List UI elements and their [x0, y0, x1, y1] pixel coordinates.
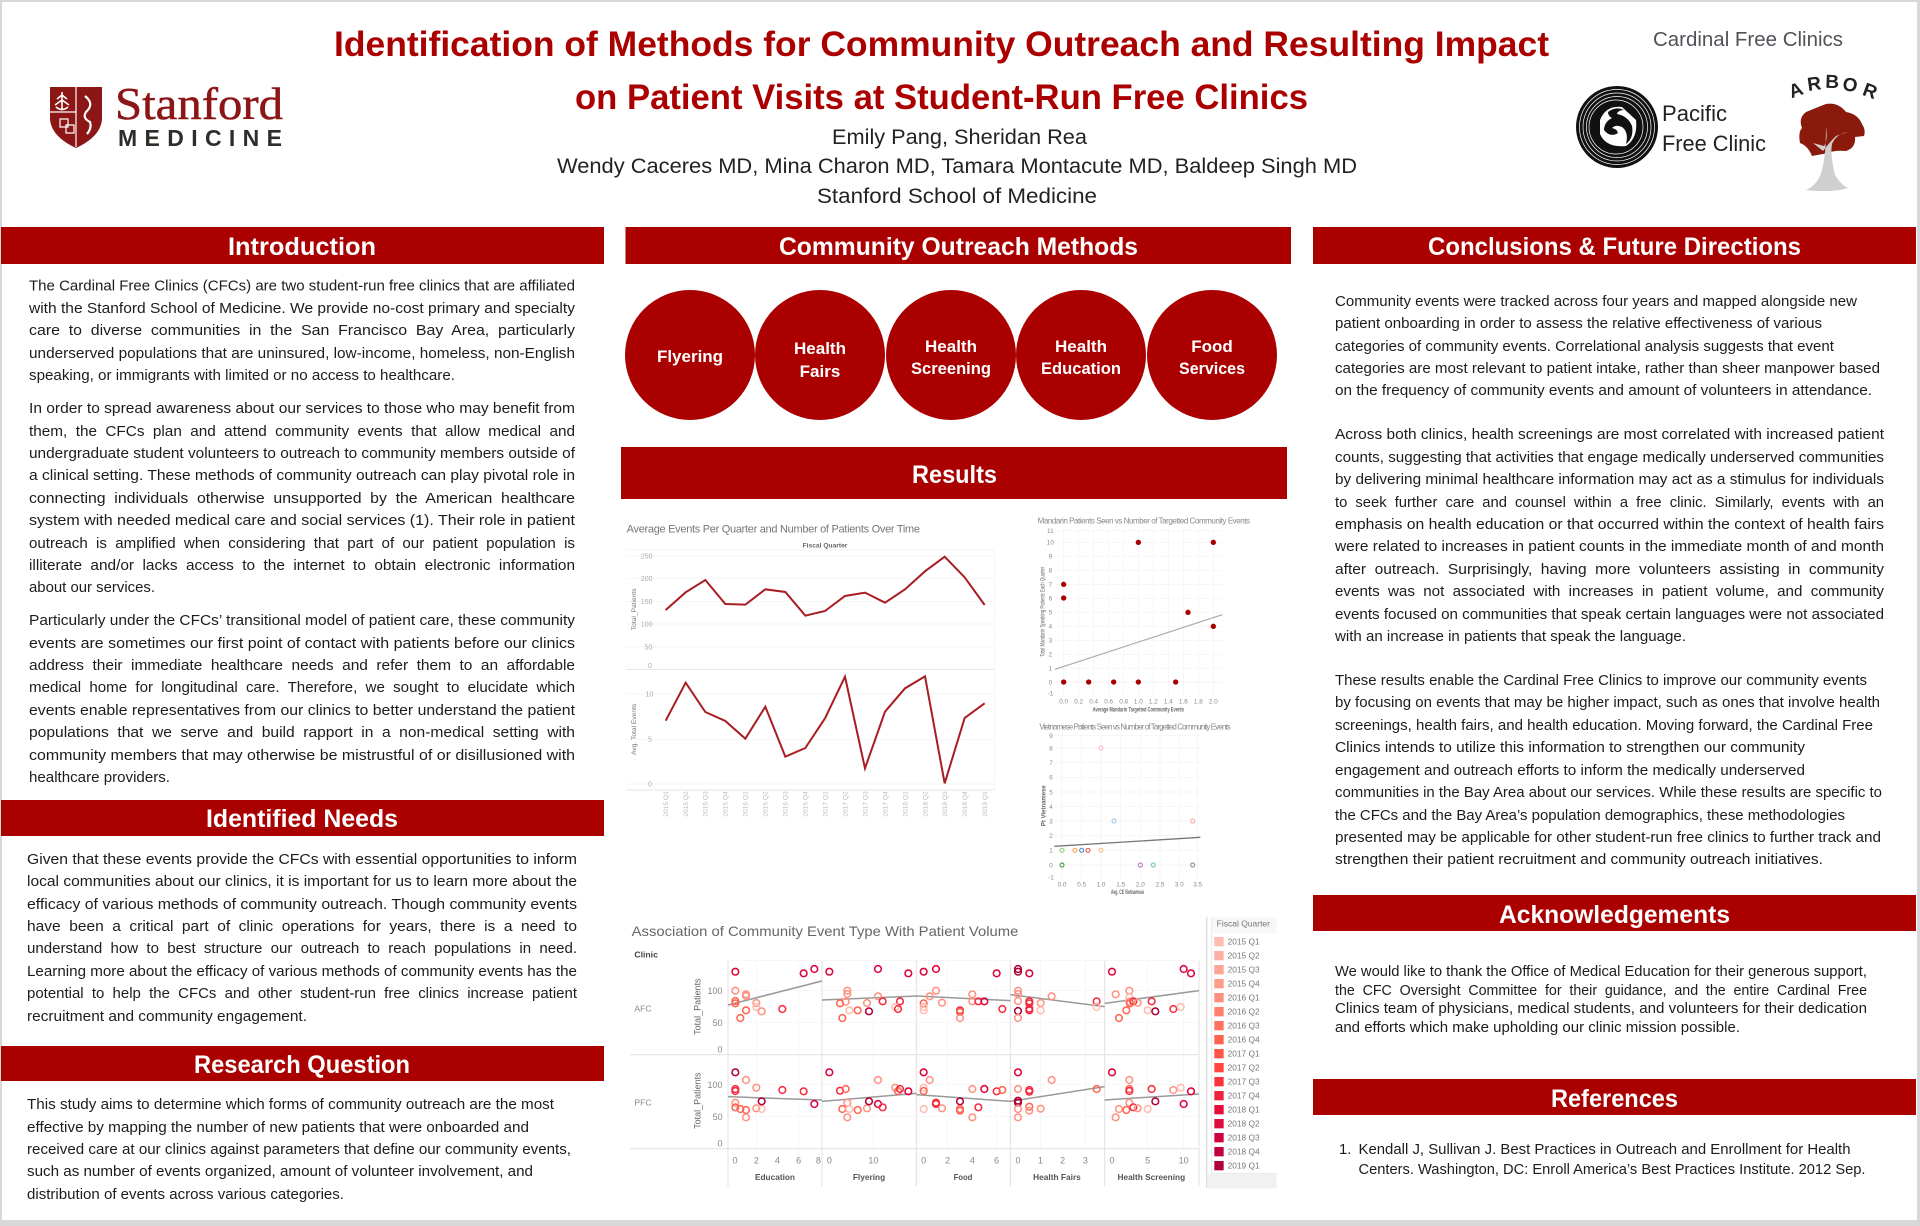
line chart: average events and patients over time: 2016 Q4: [803, 791, 810, 817]
heading: acknowledgements: Acknowledgements: [1499, 901, 1730, 929]
legend: fiscal quarter: 2015 Q1: [1228, 937, 1260, 947]
text block: identified needs: local communities about our clinics, it is important for us to learn more about the: [27, 874, 577, 890]
scatter chart: community event type vs patient volume: 1: [1038, 1155, 1043, 1165]
text block: introduction: community members that may otherwise be mistrustful of or disillusioned with: [29, 748, 575, 764]
text block: conclusions: counts, suggesting that activities that engage medically underserved communities: [1335, 450, 1884, 466]
heading: introduction: [1, 227, 604, 264]
heading: community outreach methods: Community Outreach Methods: [779, 233, 1138, 261]
scatter chart: community event type vs patient volume: 10: [1179, 1155, 1189, 1165]
text block: conclusions: screenings, health fairs, and health education. Moving forward, the Cardinal Free: [1335, 718, 1873, 734]
title: Identification of Methods for Community Outreach and Resulting Impact: [334, 25, 1549, 64]
scatter chart: mandarin patients: 6: [1049, 596, 1053, 603]
heading: identified needs: Identified Needs: [206, 805, 398, 833]
circle: health fairs: [755, 290, 885, 420]
text block: conclusions: events focused on communities that speak certain languages were not associated: [1335, 607, 1884, 623]
text block: conclusions: engagement and outreach efforts to inform the medically underserved: [1335, 763, 1805, 779]
text block: conclusions: strengthen their patient recruitment and community outreach initiatives.: [1335, 852, 1823, 868]
scatter chart: mandarin patients: 1.4: [1164, 699, 1173, 706]
legend: fiscal quarter: 2016 Q2: [1228, 1007, 1260, 1017]
scatter chart: mandarin patients: 10: [1047, 540, 1054, 547]
logo: Arbor Free Clinic: R: [1806, 73, 1823, 96]
circle: food services: Food: [1191, 337, 1233, 356]
scatter chart: mandarin patients: 1.6: [1179, 699, 1188, 706]
authors and affiliation: [557, 126, 1357, 208]
scatter chart: mandarin patients: 1.0: [1134, 699, 1143, 706]
text block: introduction: with the Stanford School of Medicine. We provide no-cost primary and specialty: [28, 301, 576, 317]
scatter chart: community event type vs patient volume: PFC: [634, 1097, 652, 1107]
legend: fiscal quarter: 2015 Q3: [1228, 965, 1260, 975]
text block: conclusions: categories are most relevant to patient intake, rather than sheer manpower based: [1335, 361, 1880, 377]
text block: research question: This study aims to determine which forms of community outreach are the most: [27, 1097, 554, 1113]
text block: conclusions: events was not associated with increases in patient volume, and community: [1335, 584, 1885, 600]
scatter chart: mandarin patients: 8: [1049, 568, 1053, 575]
scatter chart: community event type vs patient volume: Association of Community Event Type With Patient Volume: [632, 923, 1019, 939]
text block: introduction: connecting individuals otherwise unsupported by the American healthcare: [29, 491, 575, 507]
scatter chart: mandarin patients: 11: [1047, 528, 1054, 535]
scatter chart: community event type vs patient volume: 0: [717, 1138, 722, 1148]
legend: fiscal quarter: Fiscal Quarter: [1217, 920, 1270, 929]
scatter chart: community event type vs patient volume: 6: [994, 1155, 999, 1165]
heading: conclusions and future directions: [1313, 227, 1916, 264]
legend: fiscal quarter: 2018 Q4: [1228, 1147, 1260, 1157]
scatter chart: vietnamese patients: 3.5: [1193, 882, 1203, 889]
line chart: average events and patients over time: 2018 Q1: [902, 791, 909, 817]
scatter chart: vietnamese patients: 6: [1049, 775, 1053, 782]
text block: references: Centers. Washington, DC: Enroll America’s Best Practices Institute. 2012 Sep.: [1358, 1162, 1866, 1178]
text block: introduction: underserved populations that are uninsured, low-income, homeless, non-English: [29, 346, 575, 362]
scatter chart: community event type vs patient volume: 0: [1015, 1155, 1020, 1165]
line chart: average events and patients over time: 2017 Q3: [862, 791, 869, 817]
scatter chart: community event type vs patient volume: 50: [713, 1112, 723, 1122]
line chart: average events and patients over time: 2016 Q2: [763, 791, 770, 817]
text block: introduction: care to diverse communities in the San Francisco Bay Area, particularly: [29, 323, 576, 339]
text block: conclusions: by delivering minimal healthcare information may act as a stimulus for individuals: [1335, 472, 1884, 488]
scatter chart: community event type vs patient volume: 10: [868, 1155, 878, 1165]
legend: fiscal quarter: 2016 Q1: [1228, 993, 1260, 1003]
authors and affiliation: Stanford School of Medicine: [817, 185, 1097, 208]
scatter chart: mandarin patients: 5: [1049, 610, 1053, 617]
scatter chart: mandarin patients: [1038, 516, 1250, 713]
text block: identified needs: [27, 852, 577, 1025]
circle: health education: Health: [1055, 337, 1107, 356]
text block: conclusions: with an increase in patients that speak the language.: [1334, 629, 1686, 645]
text block: introduction: a clinical setting. These methods of community outreach can play pivotal role in: [29, 468, 575, 484]
text block: acknowledgements: [1335, 964, 1867, 1036]
scatter chart: vietnamese patients: 9: [1049, 733, 1053, 740]
scatter chart: community event type vs patient volume: Health Screening: [1117, 1172, 1185, 1182]
text block: introduction: events are sometimes our first point of contact with patients before our clinics: [29, 636, 575, 652]
scatter chart: community event type vs patient volume: Health Fairs: [1033, 1172, 1081, 1182]
scatter chart: community event type vs patient volume: 0: [732, 1155, 737, 1165]
scatter chart: vietnamese patients: 3: [1049, 818, 1053, 825]
line chart: average events and patients over time: Fiscal Quarter: [803, 542, 848, 549]
legend: fiscal quarter: [1206, 917, 1277, 1188]
scatter chart: mandarin patients: -1: [1048, 691, 1054, 698]
heading: community outreach methods: [626, 227, 1291, 264]
text block: references: [1339, 1142, 1866, 1178]
scatter chart: vietnamese patients: Vietnamese Patients Seen vs Number of Targetted Community Events: [1039, 723, 1231, 732]
text block: research question: distribution of events across various categories.: [27, 1187, 344, 1203]
text block: conclusions: after outreach. Surprisingly, having more volunteers assisting in community: [1335, 562, 1885, 578]
legend: fiscal quarter: 2019 Q1: [1228, 1161, 1260, 1171]
panel: acknowledgements: [1313, 895, 1916, 1036]
scatter chart: mandarin patients: 3: [1049, 638, 1053, 645]
scatter chart: community event type vs patient volume: 2: [754, 1155, 759, 1165]
text block: conclusions: on the frequency of community events and amount of volunteers in attendance.: [1335, 383, 1872, 399]
scatter chart: vietnamese patients: 2.0: [1136, 882, 1145, 889]
text block: conclusions: emphasis on health education or that occurred within the context of health fairs: [1335, 517, 1884, 533]
circle: health fairs: Health: [794, 339, 846, 358]
scatter chart: community event type vs patient volume: Flyering: [853, 1172, 885, 1182]
circle: flyering: [625, 290, 755, 420]
scatter chart: community event type vs patient volume: 0: [921, 1155, 926, 1165]
panel: community outreach methods: [625, 227, 1291, 420]
logo: Cardinal Free Clinics wordmark: Cardinal Free Clinics: [1653, 29, 1843, 51]
line chart: average events and patients over time: 2018 Q4: [962, 791, 969, 817]
logo: Arbor Free Clinic: O: [1841, 74, 1859, 97]
text block: introduction: In order to spread awareness about our services to those who may benefit from: [29, 401, 575, 417]
text block: conclusions: communities in the Bay Area about our services. While these results are specific to: [1335, 785, 1882, 801]
scatter chart: vietnamese patients: 3.0: [1175, 882, 1184, 889]
text block: research question: such as number of events organized, amount of volunteer involvement, and: [27, 1164, 533, 1180]
scatter chart: community event type vs patient volume: 2: [945, 1155, 950, 1165]
scatter chart: vietnamese patients: 2: [1049, 833, 1053, 840]
text block: identified needs: efficacy of various methods of community outreach. Though community events: [27, 897, 577, 913]
scatter chart: vietnamese patients: 5: [1049, 789, 1053, 796]
scatter chart: mandarin patients: Average Mandarin Targetted Community Events: [1093, 707, 1184, 713]
line chart: average events and patients over time: 2017 Q4: [882, 791, 889, 817]
scatter chart: community event type vs patient volume: 8: [816, 1155, 821, 1165]
scatter chart: vietnamese patients: 2.5: [1156, 882, 1165, 889]
circle: health education: [1016, 290, 1146, 420]
scatter chart: community event type vs patient volume: 2: [1060, 1155, 1065, 1165]
scatter chart: mandarin patients: 2.0: [1209, 699, 1218, 706]
text block: introduction: outreach is amplified when considering that part of our patient population is: [29, 536, 575, 552]
heading: references: [1313, 1079, 1916, 1115]
text block: conclusions: presented may be applicable for other student-run free clinics to further track and: [1335, 830, 1881, 846]
text block: conclusions: categories of community events. Correlational analysis suggests that event: [1335, 339, 1834, 355]
scatter chart: community event type vs patient volume: 50: [713, 1018, 723, 1028]
legend: fiscal quarter: 2017 Q2: [1228, 1063, 1260, 1073]
circle: health screening: Health: [925, 337, 977, 356]
line chart: average events and patients over time: 0: [648, 781, 652, 788]
scatter chart: mandarin patients: 0.6: [1104, 699, 1114, 706]
legend: fiscal quarter: 2018 Q2: [1228, 1119, 1260, 1129]
legend: fiscal quarter: 2016 Q4: [1228, 1035, 1260, 1045]
line chart: average events and patients over time: 2015 Q4: [723, 791, 730, 817]
heading: conclusions and future directions: Conclusions & Future Directions: [1428, 233, 1801, 261]
scatter chart: community event type vs patient volume: 6: [796, 1155, 801, 1165]
scatter chart: mandarin patients: 0.2: [1074, 699, 1084, 706]
scatter chart: vietnamese patients: [1039, 723, 1231, 896]
circle: health education: Education: [1041, 359, 1121, 378]
line chart: average events and patients over time: 200: [641, 576, 653, 583]
line chart: average events and patients over time: 50: [644, 644, 652, 651]
line chart: average events and patients over time: 2015 Q1: [663, 791, 670, 817]
panel: research question: [1, 1046, 604, 1203]
text block: conclusions: Across both clinics, health screenings are most correlated with increased patient: [1335, 427, 1884, 443]
scatter chart: mandarin patients: 2: [1049, 652, 1053, 659]
line chart: average events and patients over time: 2017 Q1: [822, 791, 829, 817]
line chart: average events and patients over time: 0: [648, 663, 652, 670]
scatter chart: vietnamese patients: 4: [1049, 804, 1053, 811]
legend: fiscal quarter: 2018 Q1: [1228, 1105, 1260, 1115]
text block: acknowledgements: We would like to thank the Office of Medical Education for their generous support,: [1335, 964, 1867, 980]
scatter chart: community event type vs patient volume: 100: [707, 1080, 722, 1090]
panel: references: [1313, 1079, 1916, 1178]
legend: fiscal quarter: 2017 Q3: [1228, 1077, 1260, 1087]
line chart: average events and patients over time: 2019 Q1: [982, 791, 989, 817]
text block: conclusions: the CFCs and the Bay Area’s population demographics, these methodologies: [1335, 808, 1845, 824]
line chart: average events and patients over time: 10: [645, 691, 653, 698]
text block: conclusions: Clinics intends to utilize this information to strengthen our community: [1335, 740, 1806, 756]
scatter chart: vietnamese patients: Avg. CE Vietnamese: [1111, 890, 1144, 896]
scatter chart: vietnamese patients: 0.0: [1058, 882, 1067, 889]
logo: Stanford Medicine: MEDICINE: [118, 125, 282, 151]
text block: identified needs: recruitment and community engagement.: [27, 1009, 307, 1025]
text block: introduction: The Cardinal Free Clinics (CFCs) are two student-run free clinics that are affiliated: [29, 278, 575, 294]
scatter chart: mandarin patients: 0.8: [1119, 699, 1129, 706]
text block: introduction: them, the CFCs plan and attend community events that allow medical and: [29, 424, 575, 440]
logo: Arbor Free Clinic: A: [1786, 79, 1806, 103]
circle: food services: [1147, 290, 1277, 420]
text block: conclusions: [1334, 294, 1885, 868]
heading: research question: Research Question: [194, 1051, 410, 1079]
text block: identified needs: understand how to best structure our outreach to reach populations in need.: [27, 941, 577, 957]
heading: identified needs: [1, 800, 604, 836]
text block: conclusions: patient onboarding in order to assess the relative effectiveness of various: [1335, 316, 1822, 332]
text block: introduction: medical home for longitudinal care. Therefore, we sought to elucidate which: [29, 680, 575, 696]
text block: introduction: healthcare providers.: [29, 770, 170, 786]
scatter chart: community event type vs patient volume: AFC: [634, 1003, 652, 1013]
scatter chart: community event type vs patient volume: 0: [717, 1044, 722, 1054]
scatter chart: mandarin patients: 1: [1049, 666, 1053, 673]
text block: identified needs: potential to help the CFCs and other student-run free clinics increase patient: [27, 986, 577, 1002]
logo: Stanford Medicine: [50, 79, 283, 151]
line chart: average events and patients over time: 2018 Q2: [922, 791, 929, 817]
scatter chart: community event type vs patient volume: [630, 923, 1199, 1187]
heading: results: [621, 447, 1287, 499]
text block: conclusions: by focusing on events that may be higher impact, such as ones that involve health: [1335, 695, 1880, 711]
text block: introduction: system with needed medical care and social services (1). Their role in patient: [29, 513, 575, 529]
heading: references: References: [1551, 1085, 1678, 1113]
scatter chart: mandarin patients: 4: [1049, 624, 1053, 631]
heading: acknowledgements: [1313, 895, 1916, 931]
line chart: average events and patients over time: [626, 524, 994, 817]
text block: introduction: undergraduate student volunteers to outreach to community members outside of: [29, 446, 576, 462]
text block: identified needs: Learning more about the efficacy of various methods of community events has the: [27, 964, 577, 980]
scatter chart: vietnamese patients: 1.5: [1116, 882, 1126, 889]
circle: health fairs: Fairs: [800, 362, 840, 381]
line chart: average events and patients over time: 2015 Q2: [683, 791, 690, 817]
circle: health screening: Screening: [911, 359, 991, 378]
line chart: average events and patients over time: 250: [641, 553, 653, 560]
line chart: average events and patients over time: 100: [641, 621, 653, 628]
text block: conclusions: to seek further care and counsel within a free clinic. Similarly, events with an: [1335, 495, 1884, 511]
text block: introduction: Particularly under the CFCs’ transitional model of patient care, these community: [29, 613, 576, 629]
scatter chart: vietnamese patients: Pt Vietnamese: [1042, 785, 1048, 826]
scatter chart: community event type vs patient volume: 5: [1145, 1155, 1150, 1165]
text block: introduction: illiterate and/or lacks access to the internet to obtain electronic information: [29, 558, 575, 574]
text block: acknowledgements: and efforts which make upholding our clinic mission possible.: [1335, 1020, 1740, 1036]
scatter chart: mandarin patients: Total Mandarin Speaking Patients Each Quarter: [1040, 567, 1046, 657]
heading: introduction: Introduction: [228, 233, 376, 261]
line chart: average events and patients over time: Avg. Total Events: [631, 703, 638, 755]
legend: fiscal quarter: 2016 Q3: [1228, 1021, 1260, 1031]
scatter chart: vietnamese patients: 8: [1049, 745, 1053, 752]
authors and affiliation: Wendy Caceres MD, Mina Charon MD, Tamara Montacute MD, Baldeep Singh MD: [557, 155, 1357, 178]
logo: Arbor Free Clinic: R: [1860, 80, 1880, 104]
text block: conclusions: These results enable the Cardinal Free Clinics to improve our community events: [1335, 673, 1867, 689]
scatter chart: vietnamese patients: 0: [1049, 862, 1053, 869]
logo: Stanford Medicine: Stanford: [115, 79, 283, 129]
scatter chart: mandarin patients: 9: [1049, 554, 1053, 561]
circle: health screening: [886, 290, 1016, 420]
line chart: average events and patients over time: 150: [641, 599, 653, 606]
scatter chart: mandarin patients: 0: [1049, 679, 1053, 686]
title: on Patient Visits at Student-Run Free Clinics: [575, 78, 1308, 117]
text block: acknowledgements: Clinics team of physicians, medical students, and volunteers for their dedication: [1335, 1001, 1867, 1017]
logo: Arbor Free Clinic: B: [1825, 72, 1839, 93]
logo: Pacific Free Clinic: [1576, 86, 1766, 168]
logo: Pacific Free Clinic: Free Clinic: [1662, 131, 1766, 156]
legend: fiscal quarter: 2017 Q1: [1228, 1049, 1260, 1059]
text block: introduction: [28, 278, 576, 786]
line chart: average events and patients over time: Average Events Per Quarter and Number of Patients Over Time: [627, 524, 920, 536]
heading: research question: [1, 1046, 604, 1081]
text block: identified needs: have been a critical part of clinic operations for years, there is a need to: [27, 919, 577, 935]
scatter chart: mandarin patients: 0.4: [1089, 699, 1099, 706]
legend: fiscal quarter: 2015 Q2: [1228, 951, 1260, 961]
scatter chart: community event type vs patient volume: Total_Patients: [693, 978, 703, 1035]
text block: references: 1.: [1339, 1142, 1351, 1158]
text block: acknowledgements: the CFC Oversight Committee for their guidance, and the entire Cardinal Free: [1335, 983, 1867, 999]
scatter chart: vietnamese patients: 1: [1049, 848, 1053, 855]
text block: introduction: populations that we serve and build rapport in a non-medical setting with: [29, 725, 575, 741]
scatter chart: mandarin patients: Mandarin Patients Seen vs Number of Targetted Community Events: [1038, 516, 1250, 525]
scatter chart: vietnamese patients: 0.5: [1077, 882, 1087, 889]
text block: introduction: events enable representatives from our clinics to better understand the patient: [29, 703, 575, 719]
text block: conclusions: Community events were tracked across four years and mapped alongside new: [1335, 294, 1857, 310]
scatter chart: mandarin patients: 1.8: [1194, 699, 1203, 706]
legend: fiscal quarter: 2015 Q4: [1228, 979, 1260, 989]
text block: introduction: about our services.: [29, 580, 155, 596]
legend: fiscal quarter: 2017 Q4: [1228, 1091, 1260, 1101]
text block: identified needs: Given that these events provide the CFCs with essential opportunities to inform: [27, 852, 577, 868]
panel: introduction: [1, 227, 604, 786]
legend: fiscal quarter: 2018 Q3: [1228, 1133, 1260, 1143]
scatter chart: community event type vs patient volume: 4: [970, 1155, 975, 1165]
scatter chart: community event type vs patient volume: Education: [755, 1172, 795, 1182]
text block: references: Kendall J, Sullivan J. Best Practices in Outreach and Enrollment for Health: [1358, 1142, 1850, 1158]
panel: conclusions and future directions: [1313, 227, 1916, 868]
scatter chart: community event type vs patient volume: 3: [1083, 1155, 1088, 1165]
scatter chart: vietnamese patients: -1: [1048, 875, 1054, 882]
scatter chart: community event type vs patient volume: 0: [827, 1155, 832, 1165]
panel: identified needs: [1, 800, 604, 1025]
scatter chart: community event type vs patient volume: 100: [707, 986, 722, 996]
text block: introduction: address their immediate healthcare needs and refer them to an affordable: [29, 658, 575, 674]
line chart: average events and patients over time: Total_Patients: [631, 588, 638, 630]
line chart: average events and patients over time: 5: [648, 737, 652, 744]
scatter chart: community event type vs patient volume: Food: [954, 1172, 972, 1182]
scatter chart: mandarin patients: 7: [1049, 582, 1053, 589]
authors and affiliation: Emily Pang, Sheridan Rea: [832, 126, 1087, 149]
title: [334, 25, 1549, 117]
line chart: average events and patients over time: 2015 Q3: [703, 791, 710, 817]
line chart: average events and patients over time: 2017 Q2: [842, 791, 849, 817]
scatter chart: vietnamese patients: 7: [1049, 760, 1053, 767]
circle: flyering: Flyering: [657, 347, 723, 366]
scatter chart: community event type vs patient volume: Total_Patients: [693, 1072, 703, 1129]
logo: Pacific Free Clinic: Pacific: [1662, 101, 1727, 126]
scatter chart: community event type vs patient volume: 0: [1109, 1155, 1114, 1165]
line chart: average events and patients over time: 2018 Q3: [942, 791, 949, 817]
text block: research question: effective by mapping the number of new patients that were onboarded and: [27, 1120, 529, 1136]
heading: results: Results: [912, 461, 997, 489]
circle: food services: Services: [1179, 359, 1245, 378]
scatter chart: mandarin patients: 1.2: [1149, 699, 1158, 706]
text block: conclusions: were related to increases in patient counts in the immediate month of and month: [1334, 539, 1884, 555]
scatter chart: vietnamese patients: 1.0: [1097, 882, 1106, 889]
text block: introduction: speaking, or immigrants with limited or no access to healthcare.: [29, 368, 455, 384]
text block: research question: received care at our clinics against parameters that define our community events,: [27, 1142, 571, 1158]
logo: Arbor Free Clinic: [1786, 72, 1880, 191]
scatter chart: community event type vs patient volume: 4: [775, 1155, 780, 1165]
line chart: average events and patients over time: 2016 Q3: [783, 791, 790, 817]
scatter chart: mandarin patients: 0.0: [1059, 699, 1069, 706]
text block: research question: [27, 1097, 571, 1203]
scatter chart: community event type vs patient volume: Clinic: [634, 949, 658, 959]
line chart: average events and patients over time: 2016 Q1: [743, 791, 750, 817]
